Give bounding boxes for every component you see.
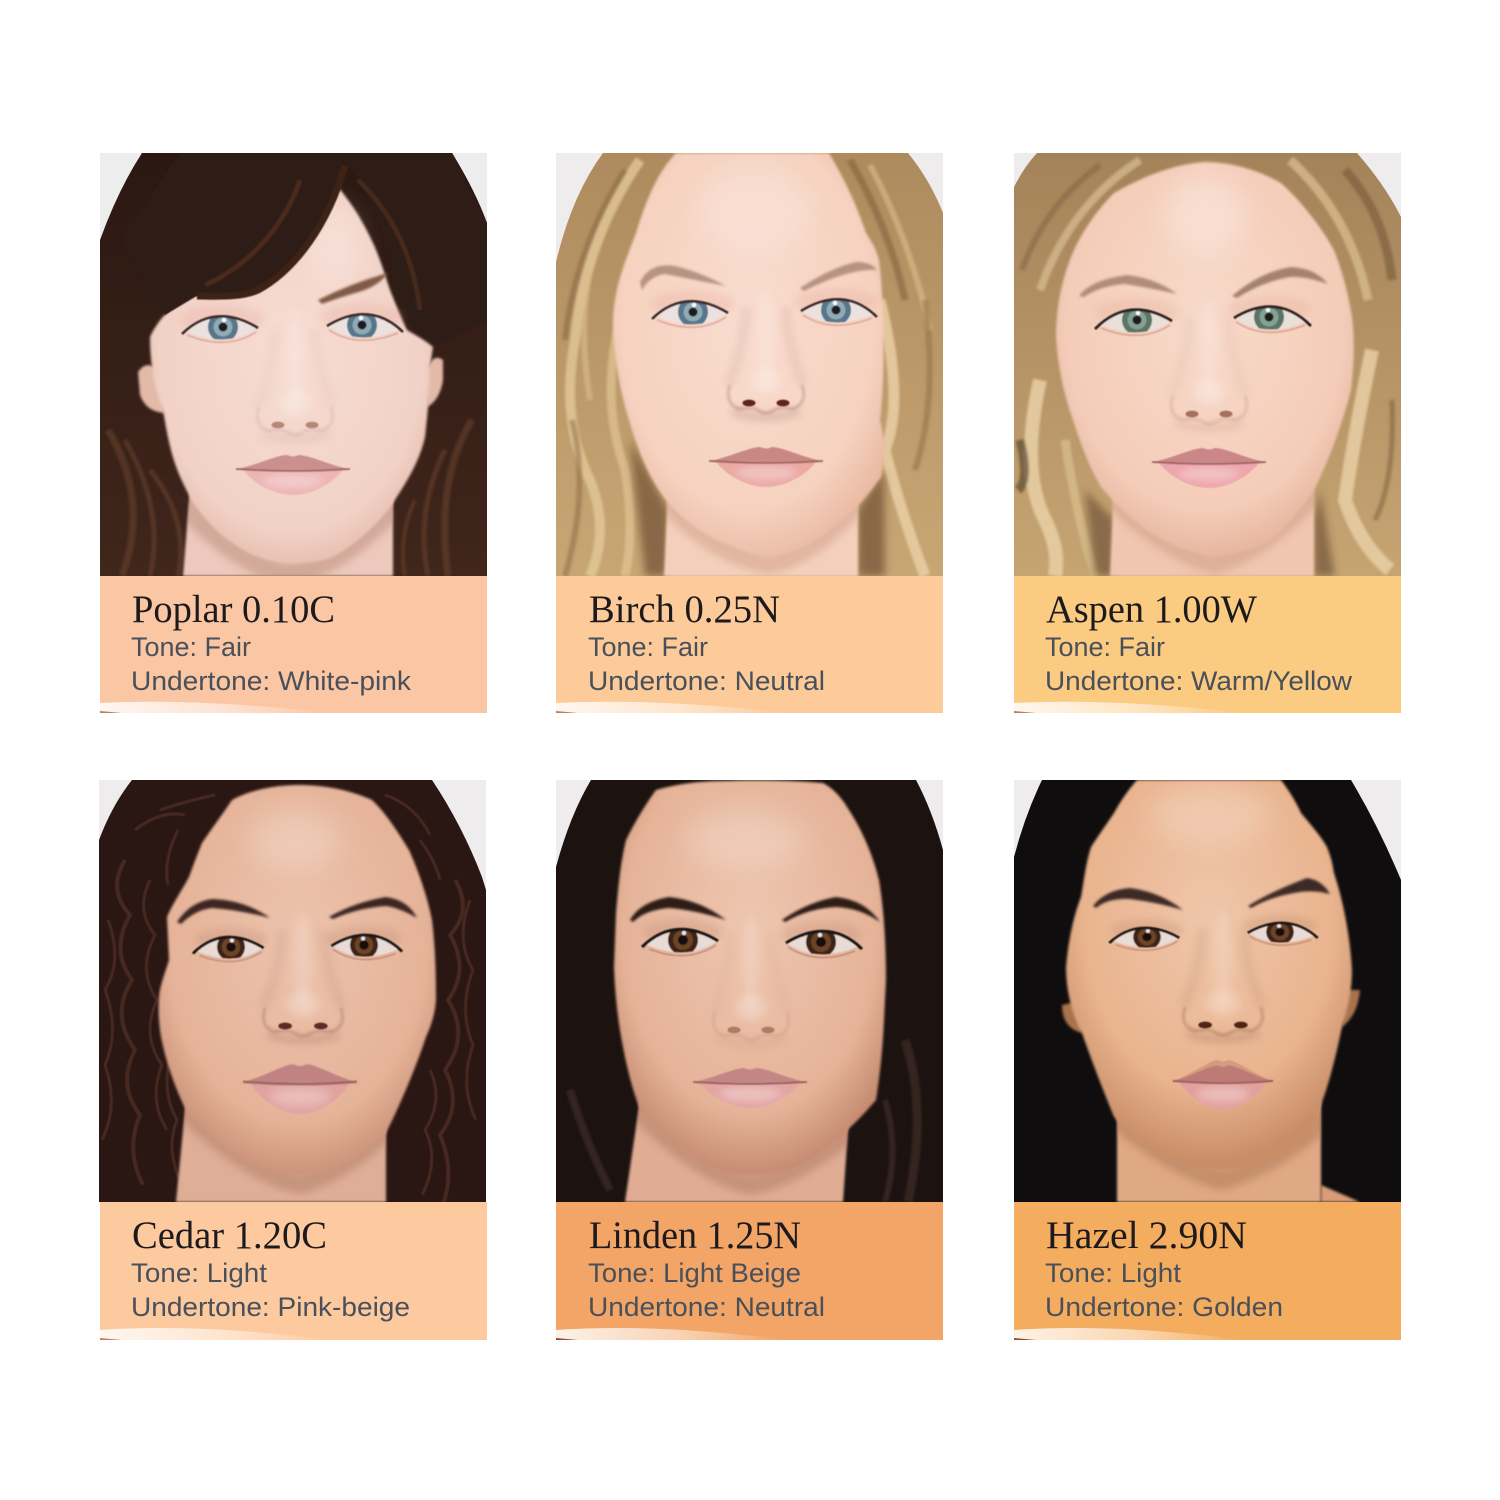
nose <box>1183 911 1263 1039</box>
lips <box>693 1068 807 1108</box>
eyes <box>651 288 878 327</box>
label: Birch: Undertone: Neutral <box>588 666 825 696</box>
neck <box>1117 1100 1321 1202</box>
label: Poplar: Undertone: White-pink <box>131 666 412 696</box>
neck shadow hair <box>1085 490 1335 576</box>
label: Hazel: Hazel 2.90N <box>1046 1214 1247 1257</box>
hair highlights <box>108 420 472 576</box>
label: Birch: Tone: Fair <box>588 632 708 662</box>
label: Linden: Undertone: Neutral <box>588 1292 825 1322</box>
label: Hazel: Tone: Light <box>1045 1258 1182 1288</box>
label: Aspen: Aspen 1.00W <box>1046 588 1257 631</box>
hair highlights <box>570 1040 917 1202</box>
label: Aspen: Undertone: Warm/Yellow <box>1045 666 1353 696</box>
hair: black <box>1014 780 1401 1202</box>
lips <box>709 447 823 487</box>
hair: blonde <box>556 153 943 576</box>
portrait: Birch <box>556 153 943 576</box>
nose <box>713 916 789 1044</box>
eyes <box>193 925 402 962</box>
portrait: Aspen <box>1014 153 1401 576</box>
chin shadow <box>620 1090 890 1185</box>
panel: Cedar 1.20C <box>99 780 487 1340</box>
face <box>613 153 884 555</box>
eyes <box>1095 295 1311 335</box>
chin shadow <box>1113 491 1314 574</box>
label: Linden <box>556 1202 943 1340</box>
label: Birch <box>556 576 943 713</box>
neck shadow hair <box>630 440 885 576</box>
eyebrows <box>1093 878 1330 910</box>
ears <box>1062 990 1360 1033</box>
face <box>1056 162 1354 555</box>
label: Cedar <box>100 1202 487 1340</box>
face <box>150 183 433 563</box>
hair: honey blonde <box>1014 153 1401 576</box>
upper lip tone <box>1174 1060 1272 1083</box>
eyes <box>1109 914 1318 950</box>
forehead glow <box>1150 785 1270 845</box>
hair: dark curly <box>99 780 486 1202</box>
panel: Linden 1.25N <box>556 780 943 1340</box>
label: Aspen <box>1014 576 1401 713</box>
ears <box>138 358 443 413</box>
forehead glow <box>311 205 359 285</box>
hair: dark brown <box>100 153 487 576</box>
label: Hazel: Undertone: Golden <box>1045 1292 1283 1322</box>
forehead glow <box>685 810 805 870</box>
forehead glow <box>1165 175 1245 255</box>
nose <box>1171 300 1247 428</box>
portrait: Linden <box>556 780 943 1202</box>
neck <box>183 490 393 576</box>
lips <box>243 1064 357 1114</box>
panel: Hazel 2.90N <box>1014 780 1401 1340</box>
shoulder <box>1321 1185 1360 1202</box>
hair strands <box>565 160 930 576</box>
label: Poplar: Tone: Fair <box>131 632 251 662</box>
label: Cedar: Tone: Light <box>131 1258 268 1288</box>
chin shadow <box>165 1090 410 1184</box>
nose <box>256 386 334 442</box>
label: Hazel <box>1014 1202 1401 1340</box>
face <box>159 785 436 1175</box>
eyes <box>181 303 404 342</box>
face <box>1066 780 1352 1170</box>
fringe <box>164 153 487 344</box>
eyebrows <box>1079 267 1328 298</box>
lips <box>236 455 350 495</box>
label: Poplar <box>100 576 487 713</box>
chin shadow <box>667 502 858 575</box>
forehead glow <box>710 172 801 245</box>
hair curls <box>102 795 476 1205</box>
label: Cedar: Cedar 1.20C <box>132 1214 327 1257</box>
label: Birch: Birch 0.25N <box>589 588 780 631</box>
panel: Birch 0.25N <box>556 153 943 713</box>
chin shadow <box>1095 1100 1345 1180</box>
hair strands <box>1018 160 1392 576</box>
label: Poplar: Poplar 0.10C <box>132 588 335 631</box>
lips <box>1173 1066 1273 1110</box>
portrait: Poplar <box>100 153 487 576</box>
label: Cedar: Undertone: Pink-beige <box>131 1292 410 1322</box>
panel: Poplar 0.10C <box>100 153 487 713</box>
neck <box>625 1100 850 1202</box>
eyebrows <box>177 897 417 924</box>
forehead glow <box>250 810 340 870</box>
lips <box>1152 448 1266 488</box>
portrait: Cedar <box>99 780 486 1205</box>
chin shadow <box>188 498 393 576</box>
portrait: Hazel <box>1014 780 1401 1202</box>
nose <box>263 912 343 1040</box>
neck <box>176 1100 386 1202</box>
label: Linden: Tone: Light Beige <box>588 1258 801 1288</box>
label: Aspen: Tone: Fair <box>1045 632 1165 662</box>
eyebrows <box>630 897 880 922</box>
panel: Aspen 1.00W <box>1014 153 1401 713</box>
face <box>614 780 886 1175</box>
nose <box>728 289 804 417</box>
eyebrows <box>640 262 877 291</box>
eyes <box>642 919 862 958</box>
label: Linden: Linden 1.25N <box>589 1214 801 1257</box>
hair: near black <box>556 780 943 1202</box>
eyebrow <box>318 273 388 304</box>
neck <box>1110 480 1314 576</box>
neck <box>662 500 860 576</box>
